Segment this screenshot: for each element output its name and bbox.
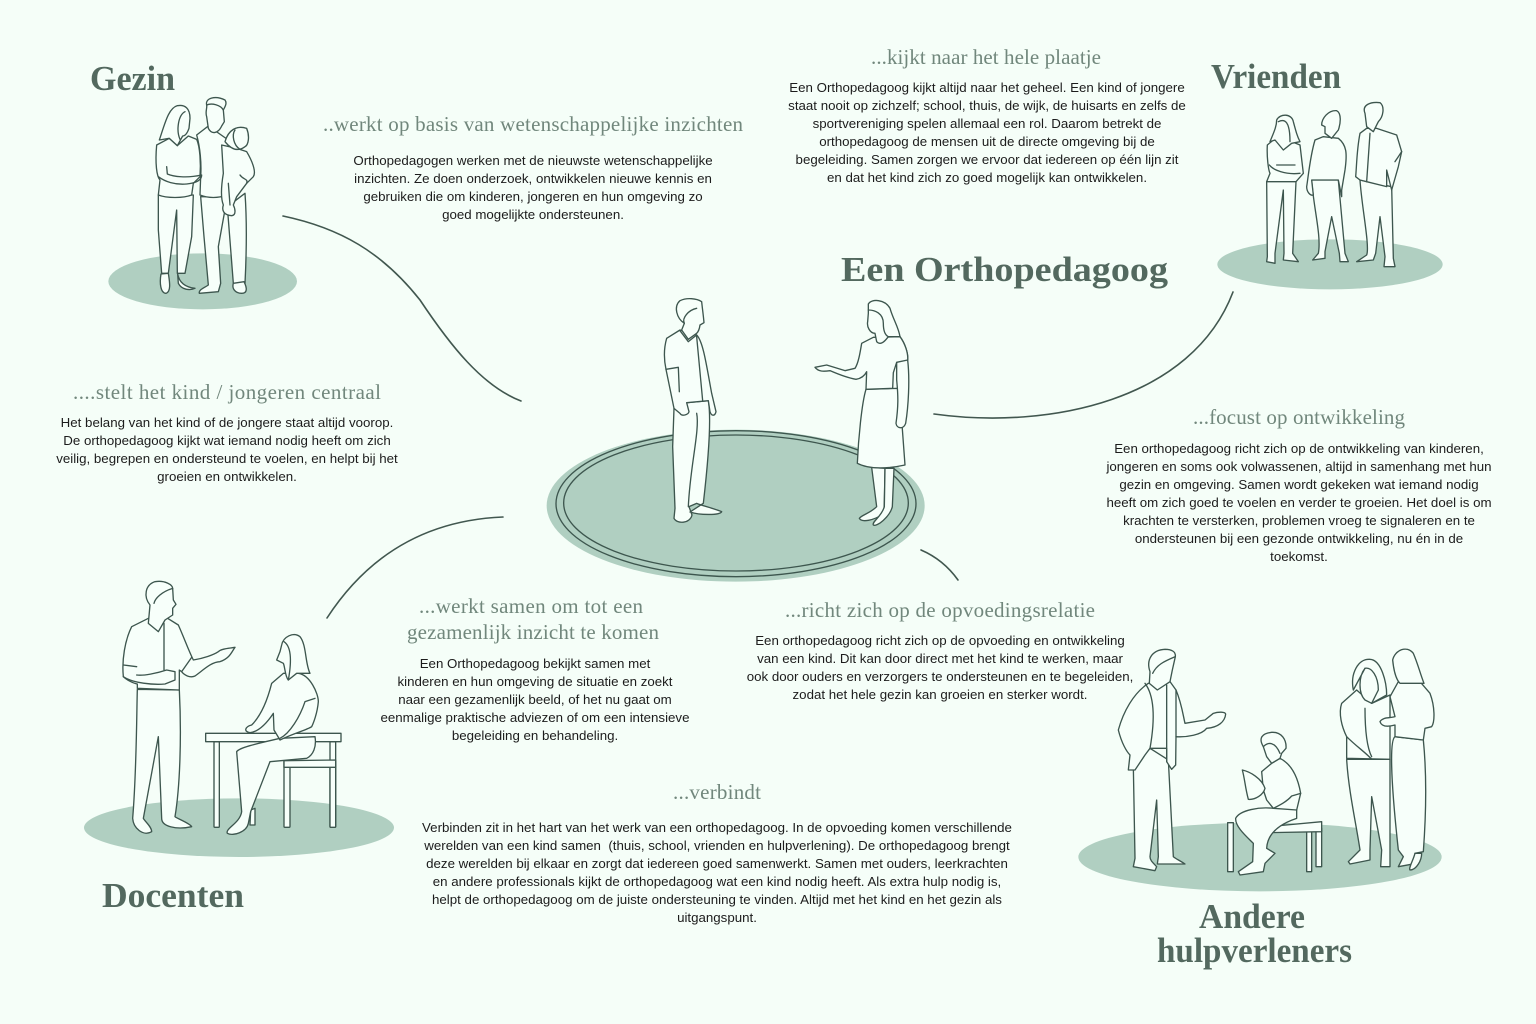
body: Een Orthopedagoog kijkt altijd naar het geheel. Een kind of jongere (789, 80, 1185, 95)
body: Een orthopedagoog richt zich op de opvoeding en ontwikkeling (755, 633, 1125, 648)
text block: samenwerken (381, 594, 689, 743)
body: Orthopedagogen werken met de nieuwste wetenschappelijke (353, 153, 713, 168)
body: jongeren en soms ook volwassenen, altijd in samenhang met hun (1105, 459, 1492, 474)
mother (156, 105, 202, 293)
subheading: ...verbindt (673, 780, 761, 804)
illustration: family on ellipse (108, 98, 297, 309)
subheading: ..werkt op basis van wetenschappelijke inzichten (323, 112, 744, 136)
body: begeleiding. Samen zorgen we ervoor dat iedereen op één lijn zit (796, 152, 1179, 167)
heading: Vrienden (1211, 57, 1341, 96)
title: Een Orthopedagoog (841, 250, 1169, 289)
man (664, 299, 722, 522)
body: heeft om zich goed te voelen en verder te groeien. Het doel is om (1106, 495, 1492, 510)
rug (547, 430, 925, 582)
body: naar een gezamenlijk beeld, of het nu gaat om (398, 692, 672, 707)
body: ondersteunen bij een gezonde ontwikkeling, nu én in de (1135, 531, 1463, 546)
body: helpt de orthopedagoog om de juiste ondersteuning te vinden. Altijd met het kind en het gezin als (432, 892, 1002, 907)
subheading: ....stelt het kind / jongeren centraal (73, 380, 381, 404)
body: begeleiding en behandeling. (452, 728, 618, 743)
child (221, 127, 254, 216)
table (206, 733, 341, 827)
chair (284, 760, 336, 827)
woman (1267, 115, 1303, 263)
connector: Vrienden to centre (934, 292, 1233, 418)
connector: Docenten to centre (327, 517, 503, 618)
panel: centre Een Orthopedagoog (547, 250, 1169, 582)
text block: wetenschappelijke inzichten (323, 112, 744, 222)
woman left (1340, 659, 1390, 867)
body: groeien en ontwikkelen. (157, 469, 297, 484)
subheading: ...focust op ontwikkeling (1193, 405, 1406, 429)
body: gezin en omgeving. Samen wordt gekeken wat iemand nodig (1119, 477, 1479, 492)
illustration: three friends on ellipse (1217, 102, 1443, 289)
body: sportvereniging spelen allemaal een rol. Daarom betrekt de (813, 116, 1161, 131)
body: deze werelden bij elkaar en zorgt dat iedereen goed samenwerkt. Samen met ouders, leerkrachten (426, 856, 1008, 871)
body: staat nooit op zichzelf; school, thuis, de wijk, de huisarts en zelfs de (788, 98, 1186, 113)
body: eenmalige praktische adviezen of om een intensieve (381, 710, 689, 725)
body: Een Orthopedagoog bekijkt samen met (420, 656, 651, 671)
man centre (1307, 111, 1348, 262)
text block: kind centraal (56, 380, 398, 484)
text block: hele plaatje (788, 45, 1186, 185)
woman (815, 300, 909, 525)
connector: Andere hulpverleners to centre (921, 550, 958, 580)
body: en dat het kind zich zo goed mogelijk kan ontwikkelen. (827, 170, 1147, 185)
father (197, 98, 246, 293)
panel: Docenten (84, 581, 394, 915)
man (1118, 649, 1226, 871)
illustration: teacher and seated woman at table (84, 581, 394, 857)
body: gebruiken die om kinderen, jongeren en hun omgeving zo (363, 189, 703, 204)
heading: Docenten (102, 876, 244, 915)
subheading: gezamenlijk inzicht te komen (407, 620, 660, 644)
text block: verbindt (422, 780, 1012, 925)
body: goed mogelijkte ondersteunen. (442, 207, 624, 222)
subheading: ...richt zich op de opvoedingsrelatie (785, 598, 1095, 622)
body: De orthopedagoog kijkt wat iemand nodig heeft om zich (63, 433, 391, 448)
body: zodat het hele gezin kan groeien en sterker wordt. (793, 687, 1087, 702)
subheading: ...werkt samen om tot een (419, 594, 644, 618)
body: werelden van een kind samen (thuis, school, vrienden en hulpverlening). De orthopedagoog brengt (423, 838, 1010, 853)
heading: Gezin (90, 59, 175, 98)
panel: Vrienden (1211, 57, 1443, 289)
body: van een kind. Dit kan door direct met het kind te werken, maar (757, 651, 1123, 666)
text block: opvoedingsrelatie (747, 598, 1133, 702)
body: ook door ouders en verzorgers te ondersteunen en te begeleiden, (747, 669, 1133, 684)
body: kinderen en hun omgeving de situatie en zoekt (398, 674, 673, 689)
body: toekomst. (1270, 549, 1328, 564)
body: Verbinden zit in het hart van het werk van een orthopedagoog. In de opvoeding komen verschillende (422, 820, 1012, 835)
subheading: ...kijkt naar het hele plaatje (871, 45, 1101, 69)
body: en andere professionals kijkt de orthopedagoog wat een kind nodig heeft. Als extra hulp nodig is, (433, 874, 1001, 889)
seated woman (227, 635, 318, 834)
panel: Gezin (90, 59, 297, 309)
text block: ontwikkeling (1105, 405, 1492, 564)
body: Een orthopedagoog richt zich op de ontwikkeling van kinderen, (1114, 441, 1484, 456)
body: orthopedagoog de mensen uit de directe omgeving bij de (819, 134, 1155, 149)
heading: Andere (1199, 897, 1305, 936)
illustration: man, child on stool and two women (1078, 649, 1442, 891)
woman right (1380, 649, 1434, 870)
stool (1228, 822, 1322, 872)
heading: hulpverleners (1157, 931, 1352, 970)
seated child (1236, 732, 1301, 875)
body: Het belang van het kind of de jongere staat altijd voorop. (61, 415, 393, 430)
body: krachten te versterken, problemen vroeg te signaleren en te (1123, 513, 1475, 528)
illustration: two people on a round rug (547, 299, 925, 582)
man right (1356, 102, 1402, 267)
body: inzichten. Ze doen onderzoek, ontwikkelen nieuwe kennis en (354, 171, 712, 186)
body: uitgangspunt. (677, 910, 757, 925)
panel: Andere hulpverleners (1078, 649, 1442, 970)
standing man (123, 581, 235, 833)
body: veilig, begrepen en ondersteund te voelen, en helpt bij het (56, 451, 398, 466)
connector: Gezin to centre (283, 216, 521, 401)
